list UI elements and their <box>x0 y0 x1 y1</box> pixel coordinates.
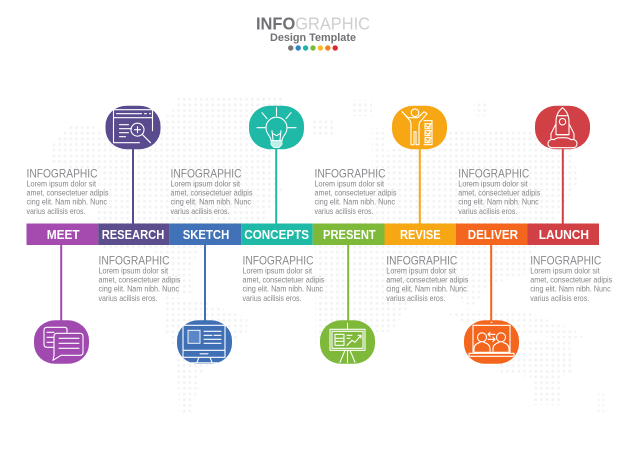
icon: concepts light bulb <box>249 106 304 149</box>
title wordmark: INFOGRAPHIC <box>256 14 370 34</box>
text block 5: INFOGRAPHIC <box>314 166 386 180</box>
text block 4: varius acilisis eros. <box>242 293 302 303</box>
step: RESEARCH: RESEARCH <box>102 227 164 242</box>
text block 6: amet, consectetuer adipis <box>386 275 468 285</box>
text block 8: amet, consectetuer adipis <box>530 275 612 285</box>
text block 3: Lorem ipsum dolor sit <box>170 178 241 188</box>
text block 2 <box>98 253 180 303</box>
step: LAUNCH <box>528 224 599 245</box>
connector stems <box>60 145 564 324</box>
text block 4: Lorem ipsum dolor sit <box>242 266 313 276</box>
text block 7 <box>458 166 540 216</box>
text block 4 <box>242 253 324 303</box>
text block 7: Lorem ipsum dolor sit <box>458 178 528 188</box>
text block 6 <box>386 253 468 303</box>
text block 1 <box>26 166 108 216</box>
text block 3: cing elit. Nam nibh. Nunc <box>170 197 252 207</box>
text block 3: INFOGRAPHIC <box>170 166 242 180</box>
text block 5: amet, consectetuer adipis <box>314 188 396 198</box>
icon: present chart board <box>320 320 375 364</box>
text block 3 <box>170 166 252 216</box>
step: SKETCH: SKETCH <box>183 227 229 242</box>
step: SKETCH <box>170 224 241 245</box>
subtitle: Design Template <box>270 32 356 44</box>
colour dots <box>288 45 338 51</box>
text block 6: cing elit. Nam nibh. Nunc <box>386 284 467 294</box>
text block 1: amet, consectetuer adipis <box>26 188 108 198</box>
text block 5: cing elit. Nam nibh. Nunc <box>314 197 396 207</box>
text block 6: Lorem ipsum dolor sit <box>386 266 456 276</box>
text block 7: amet, consectetuer adipis <box>458 188 540 198</box>
text block 4: amet, consectetuer adipis <box>242 275 324 285</box>
text block 2: Lorem ipsum dolor sit <box>98 266 169 276</box>
text block 6: varius acilisis eros. <box>386 293 445 303</box>
step: MEET <box>26 224 98 245</box>
step: CONCEPTS <box>241 224 313 245</box>
text block 7: INFOGRAPHIC <box>458 166 530 180</box>
text block 1: cing elit. Nam nibh. Nunc <box>26 197 108 207</box>
text block 5 <box>314 166 396 216</box>
icon: research browser with magnifier <box>106 106 160 149</box>
step: RESEARCH <box>98 224 170 245</box>
step: REVISE <box>384 224 456 245</box>
text block 8 <box>530 253 612 303</box>
text block 1: INFOGRAPHIC <box>26 166 98 180</box>
text block 7: cing elit. Nam nibh. Nunc <box>458 197 539 207</box>
text block 8: INFOGRAPHIC <box>530 253 601 267</box>
icon: sketch desktop monitor <box>177 320 232 364</box>
text block 2: INFOGRAPHIC <box>98 253 170 267</box>
text block 4: INFOGRAPHIC <box>242 253 314 267</box>
text block 2: amet, consectetuer adipis <box>98 275 180 285</box>
step: DELIVER <box>456 224 528 245</box>
text block 5: Lorem ipsum dolor sit <box>314 178 385 188</box>
step: REVISE: REVISE <box>400 227 441 242</box>
timeline bar <box>26 224 599 245</box>
step: LAUNCH: LAUNCH <box>539 227 589 242</box>
step: DELIVER: DELIVER <box>468 227 519 242</box>
step: PRESENT: PRESENT <box>323 227 376 242</box>
step: PRESENT <box>313 224 384 245</box>
icon: meet chat bubbles <box>34 320 89 364</box>
text block 1: Lorem ipsum dolor sit <box>26 178 97 188</box>
text block 8: Lorem ipsum dolor sit <box>530 266 600 276</box>
text block 3: varius acilisis eros. <box>170 206 230 216</box>
text block 1: varius acilisis eros. <box>26 206 86 216</box>
step: CONCEPTS: CONCEPTS <box>244 227 309 242</box>
title <box>256 14 370 51</box>
text block 5: varius acilisis eros. <box>314 206 374 216</box>
icon: deliver laptop with people <box>464 320 519 364</box>
text block 2: varius acilisis eros. <box>98 293 158 303</box>
icon: revise person with checklist <box>392 106 447 149</box>
text block 4: cing elit. Nam nibh. Nunc <box>242 284 324 294</box>
text block 7: varius acilisis eros. <box>458 206 517 216</box>
background world map <box>52 98 604 412</box>
text block 2: cing elit. Nam nibh. Nunc <box>98 284 180 294</box>
text block 8: cing elit. Nam nibh. Nunc <box>530 284 611 294</box>
icon: launch rocket <box>535 106 590 149</box>
text block 6: INFOGRAPHIC <box>386 253 458 267</box>
text block 3: amet, consectetuer adipis <box>170 188 252 198</box>
step: MEET: MEET <box>47 227 80 242</box>
text block 8: varius acilisis eros. <box>530 293 589 303</box>
